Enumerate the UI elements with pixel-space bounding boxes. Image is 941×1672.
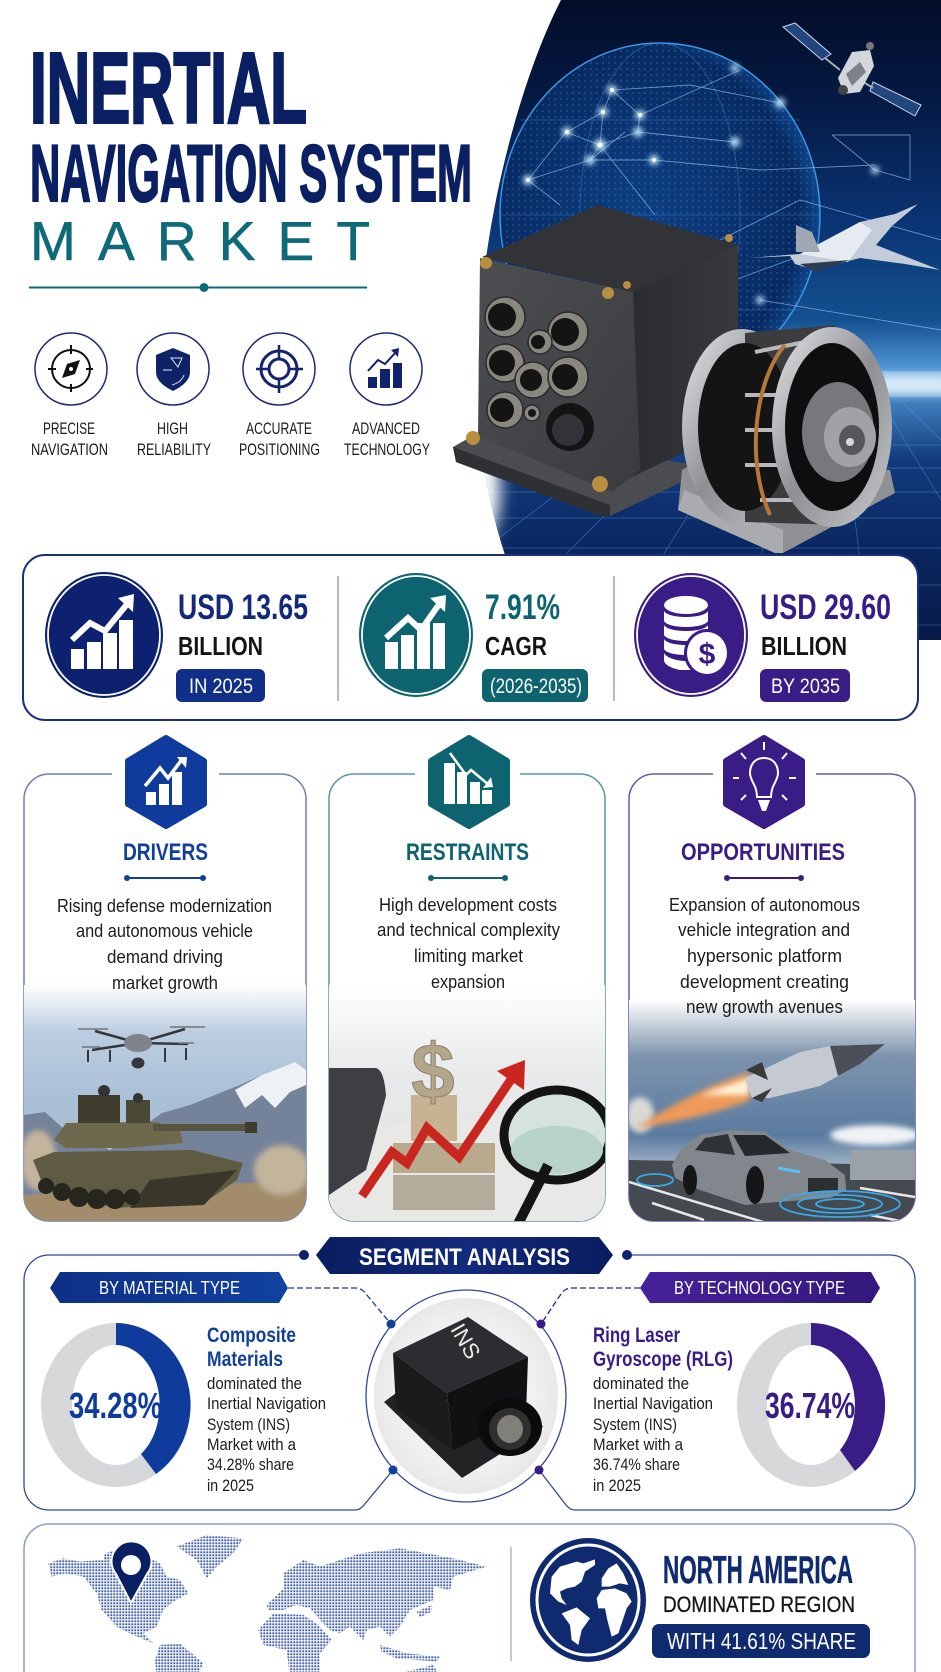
heading: opportunities: OPPORTUNITIES: [681, 839, 845, 866]
text: ring laser gyroscope: Inertial Navigation: [593, 1394, 713, 1413]
text: composite materials: Materials: [207, 1348, 283, 1371]
banner: by technology type: [640, 1272, 880, 1303]
feature: precise navigation: [31, 333, 108, 459]
magnifier: [504, 1090, 610, 1224]
feature: advanced technology: ADVANCED: [352, 419, 420, 438]
feature: advanced technology: [344, 333, 430, 459]
bracket: [678, 460, 895, 553]
stat: CAGR: CAGR: [485, 631, 547, 661]
digital globe: [499, 42, 821, 332]
text: restraints description: [377, 895, 560, 992]
pill: share: WITH 41.61% SHARE: [667, 1628, 856, 1654]
by technology type: [593, 1272, 885, 1495]
divider: opportunities: [724, 875, 804, 881]
text: ring laser gyroscope: in 2025: [593, 1476, 641, 1495]
INS module: INS: [445, 1319, 485, 1363]
fighter jet: [748, 204, 940, 272]
sensor rings: [637, 1174, 900, 1217]
text: drivers description: Rising defense modernization: [57, 896, 272, 916]
text: ring laser gyroscope: Market with a: [593, 1435, 683, 1454]
drone: [78, 1027, 205, 1068]
feature: accurate positioning: ACCURATE: [246, 419, 312, 438]
INS module: [384, 1317, 543, 1478]
text: composite materials: Composite: [207, 1324, 296, 1347]
feature: high reliability: [137, 333, 211, 459]
text: opportunities description: Expansion of autonomous: [669, 895, 860, 915]
text: dominated region: DOMINATED REGION: [663, 1592, 855, 1617]
feature: accurate positioning: POSITIONING: [239, 440, 320, 459]
heading: drivers: DRIVERS: [123, 839, 208, 866]
icon: drivers hexagon: [128, 738, 204, 826]
text: ring laser gyroscope: Ring Laser: [593, 1324, 680, 1347]
digital grid floor: [494, 400, 941, 626]
text: opportunities description: [669, 895, 860, 1017]
icon: growth bars: [368, 348, 402, 388]
pill: by 2035: [760, 669, 850, 702]
divider: restraints: [428, 875, 508, 881]
feature: precise navigation: NAVIGATION: [31, 440, 108, 459]
card outline: [24, 774, 306, 1221]
stat: market 2025: USD 13.65: [178, 588, 308, 627]
stat: CAGR: 7.91%: [485, 588, 560, 627]
image: dollar, blocks and red arrow: [329, 985, 610, 1225]
car: [672, 1130, 846, 1205]
connector lines: [288, 1288, 640, 1324]
stat: CAGR: [359, 573, 588, 702]
rocket: [636, 1044, 885, 1128]
icon: restraints hexagon: [431, 738, 507, 826]
drum: [745, 325, 840, 525]
stat: market 2025: [45, 572, 308, 702]
dollar sign: $: [411, 1027, 455, 1115]
title: [30, 32, 472, 272]
feature: advanced technology: TECHNOLOGY: [344, 440, 430, 459]
panel: restraints: [329, 738, 610, 1225]
front ring: [772, 327, 892, 527]
text: ring laser gyroscope: 36.74% share: [593, 1455, 680, 1474]
title line: Inertial: INERTIAL: [30, 32, 307, 144]
donut chart: 36.74%: 36.74%: [765, 1385, 855, 1426]
text: restraints description: expansion: [431, 972, 505, 992]
pill: in 2025: IN 2025: [189, 675, 253, 698]
banner: by material type: [50, 1272, 288, 1303]
text: restraints description: High development costs: [379, 895, 557, 915]
icon: navy growth badge: [45, 572, 163, 698]
banner: by material type: BY MATERIAL TYPE: [99, 1278, 240, 1298]
panel: segment analysis: [24, 1237, 915, 1510]
text: composite materials: [207, 1324, 326, 1495]
pill: in 2025: [176, 669, 265, 702]
icon: shield: [156, 348, 190, 391]
panel: opportunities: [626, 738, 920, 1225]
text: opportunities description: development creating: [680, 972, 849, 992]
pill: by 2035: BY 2035: [771, 675, 840, 698]
text: opportunities description: new growth avenues: [686, 997, 843, 1017]
image: rocket and car: [626, 1000, 920, 1225]
icon: teal growth badge: [359, 573, 473, 697]
icon: compass: [48, 345, 93, 392]
front face: [478, 258, 640, 492]
side face: [625, 245, 738, 480]
text: composite materials: Market with a: [207, 1435, 296, 1454]
icon: target: [256, 345, 303, 393]
by material type: [41, 1272, 326, 1495]
text: composite materials: dominated the: [207, 1374, 302, 1393]
top face: [482, 205, 738, 292]
IMU navigation box: [453, 205, 738, 516]
stat: market 2025: BILLION: [178, 631, 263, 661]
text: drivers description: [57, 896, 272, 993]
text: composite materials: Inertial Navigation: [207, 1394, 326, 1413]
panel: regional analysis: [24, 1524, 915, 1672]
screws: [466, 234, 733, 492]
hub: [802, 382, 874, 482]
network links: [528, 70, 941, 330]
text: ring laser gyroscope: [593, 1324, 733, 1495]
red arrow: [362, 1060, 525, 1196]
donut chart: 34.28%: 34.28%: [69, 1385, 162, 1426]
base plate: [453, 430, 695, 516]
title line: Navigation System: NAVIGATION SYSTEM: [30, 129, 472, 219]
feature: precise navigation: PRECISE: [43, 419, 95, 438]
pill: share: [652, 1624, 870, 1658]
text: composite materials: 34.28% share: [207, 1455, 294, 1474]
white fade under box: [486, 473, 514, 544]
panel: key statistics: [23, 555, 918, 720]
satellite: [783, 23, 921, 116]
panel: drivers: [20, 738, 310, 1225]
gyroscope assembly: [678, 325, 895, 553]
feature: high reliability: RELIABILITY: [137, 440, 211, 459]
divider: drivers: [124, 875, 206, 881]
icon: purple coins badge: $: [699, 638, 716, 671]
banner: segment analysis: [299, 1237, 632, 1274]
tank: [33, 1085, 257, 1209]
banner: segment analysis: SEGMENT ANALYSIS: [359, 1244, 570, 1271]
stat: market 2035: USD 29.60: [760, 588, 891, 627]
rear ring: [682, 329, 802, 525]
text: ring laser gyroscope: Gyroscope (RLG): [593, 1348, 733, 1371]
text: composite materials: System (INS): [207, 1415, 290, 1434]
feature: accurate positioning: [239, 333, 320, 459]
text: drivers description: demand driving: [107, 947, 223, 967]
text: drivers description: market growth: [112, 973, 218, 993]
text: opportunities description: vehicle integration and: [678, 920, 850, 940]
feature: high reliability: HIGH: [157, 419, 188, 438]
heading: restraints: RESTRAINTS: [406, 839, 529, 866]
banner: by technology type: BY TECHNOLOGY TYPE: [674, 1278, 845, 1298]
title divider: [29, 283, 367, 292]
hero image panel: [478, 0, 941, 640]
text: drivers description: and autonomous vehicle: [76, 921, 253, 941]
center device: [366, 1290, 566, 1502]
text: opportunities description: hypersonic platform: [687, 946, 842, 966]
donut chart: 36.74%: [737, 1323, 885, 1487]
horizon glow: [840, 376, 941, 392]
icon: location pin: [112, 1541, 151, 1603]
text: restraints description: and technical complexity: [377, 920, 560, 940]
text: ring laser gyroscope: dominated the: [593, 1374, 689, 1393]
pill: forecast period: [482, 669, 588, 702]
donut chart: 34.28%: [41, 1323, 191, 1487]
dotted world map: [48, 1535, 487, 1672]
icon: purple coins badge: [634, 573, 748, 697]
text: restraints description: limiting market: [414, 946, 523, 966]
image: drone and tank: [20, 985, 310, 1225]
text: composite materials: in 2025: [207, 1476, 254, 1495]
title line: Market: MARKET: [30, 210, 370, 272]
connectors: [485, 297, 588, 428]
glowing nodes: [523, 64, 879, 304]
stat: market 2035: BILLION: [761, 631, 847, 661]
text: ring laser gyroscope: System (INS): [593, 1415, 677, 1434]
icon: globe: [530, 1538, 646, 1662]
stat: market 2035: [634, 573, 891, 702]
pill: forecast period: (2026-2035): [490, 675, 582, 698]
icon: opportunities hexagon: [726, 738, 802, 826]
